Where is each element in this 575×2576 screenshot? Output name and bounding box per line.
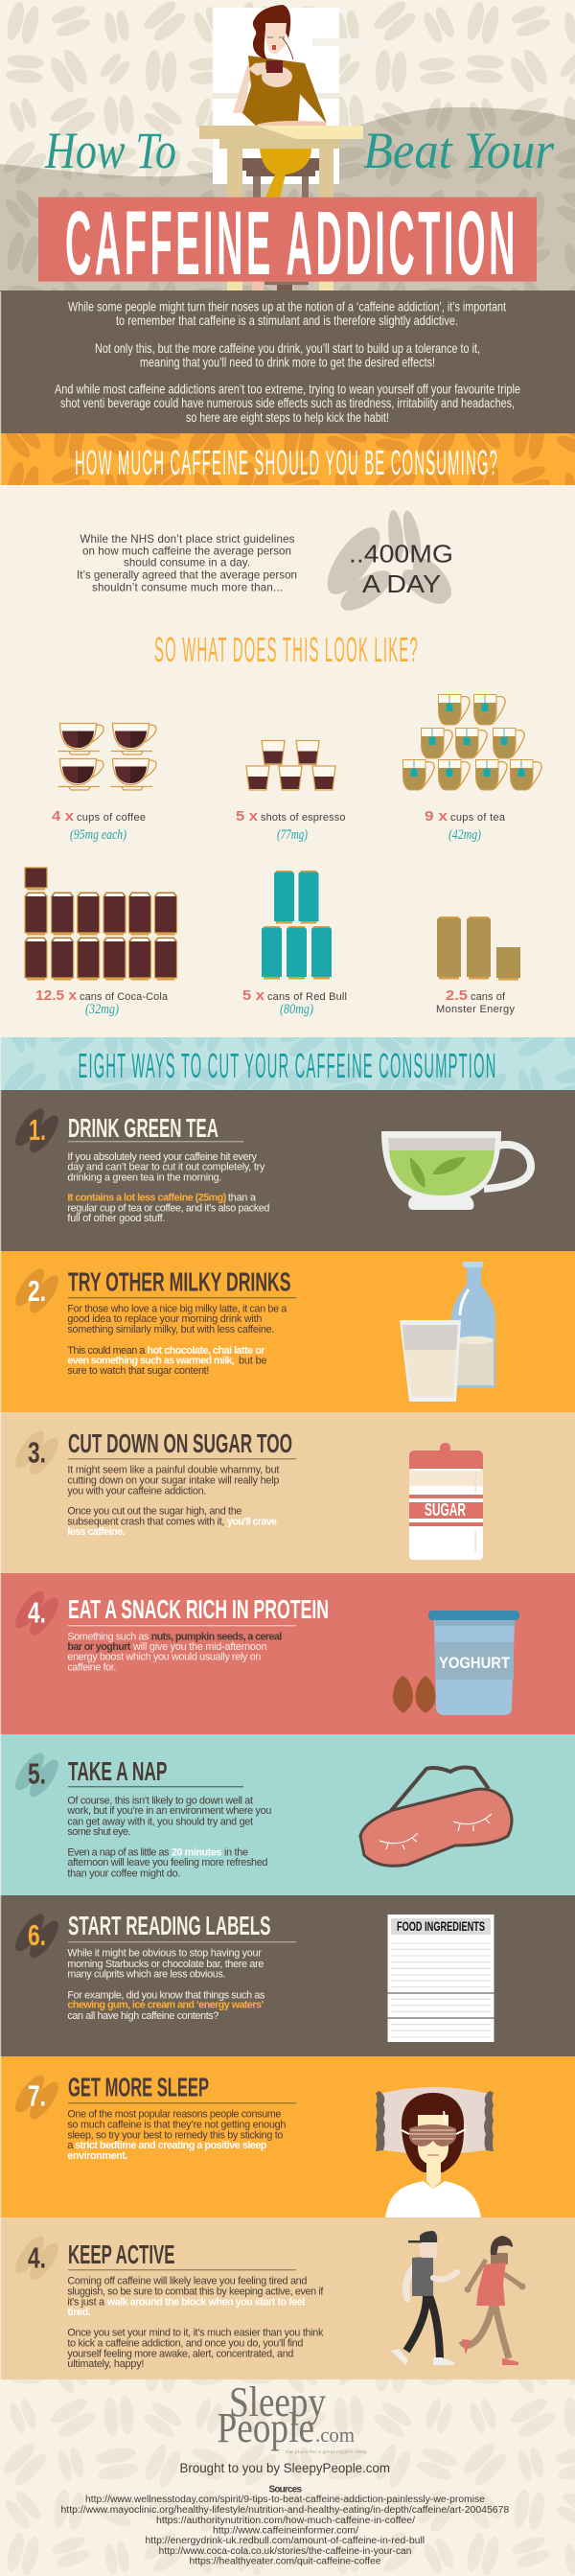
body text: Even a nap of as little as [67, 1847, 170, 1859]
number 4: 4. [28, 2241, 46, 2275]
body text: drinking a green tea in the morning. [67, 1172, 221, 1183]
heading: TRY OTHER MILKY DRINKS [68, 1267, 291, 1296]
body text: environment. [67, 2150, 127, 2162]
body text: This could mean a [67, 1345, 145, 1357]
body text: will give you the mid-afternoon [132, 1641, 266, 1653]
label: cups of coffee [52, 808, 146, 843]
number 1 [11, 1104, 63, 1157]
number 7: 7. [28, 2079, 46, 2113]
body text: yourself feeling more awake, alert, concentrated, and [67, 2348, 293, 2359]
panel: recommended amount [0, 485, 575, 1037]
number 5 [11, 1749, 63, 1801]
panel: step 1 drink green tea [0, 1090, 575, 1251]
body text: strict bedtime and creating a positive sleep [75, 2140, 267, 2151]
sources: https://healthyeater.com/quit-caffeine-coffee [190, 2556, 381, 2567]
label: cups of coffee: cups of coffee [77, 812, 146, 824]
body text: full of other good stuff. [67, 1213, 165, 1224]
label: cans of red bull: cans of Red Bull [267, 991, 347, 1003]
label: cans of coca-cola: 12.5 x [35, 987, 78, 1004]
label: cans of monster energy: cans of [471, 991, 506, 1003]
icon: red bull cans [262, 870, 332, 980]
body text: 20 minutes [172, 1847, 221, 1859]
body text [67, 2109, 286, 2162]
sources: http://www.coca-cola.co.uk/stories/the-caffeine-in-your-can [159, 2546, 411, 2557]
body text [66, 1796, 271, 1879]
body text: Once you cut out the sugar high, and the [67, 1505, 242, 1517]
body text: than a [228, 1193, 256, 1204]
number 7 [11, 2071, 63, 2123]
body text: nuts, pumpkin seeds, a cereal [151, 1632, 282, 1643]
body text: than your coffee might do. [67, 1868, 180, 1879]
panel: introduction: to remember that caffeine is a stimulant and is therefore slightly addictive. [116, 313, 458, 328]
callout: 400mg a day [349, 540, 453, 598]
panel: step 3 cut down on sugar too [0, 1412, 575, 1573]
text: NHS guidelines: shouldn’t consume much more than... [92, 581, 283, 593]
heading: EAT A SNACK RICH IN PROTEIN [68, 1594, 329, 1624]
icon: milk bottle and glass [400, 1262, 495, 1402]
label: cups of tea: (42mg) [448, 827, 481, 843]
body text: afternoon will leave you feeling more refreshed [67, 1857, 267, 1868]
label: cans of monster energy: 2.5 [446, 987, 468, 1004]
callout: 400mg a day: ..400MG [349, 540, 453, 569]
sources: http://www.mayoclinic.org/healthy-lifestyle/nutrition-and-healthy-eating/in-depth/caffeine/art-20045678 [61, 2505, 510, 2516]
body text: It might seem like a painful double whammy, but [67, 1465, 279, 1476]
panel: step 5 take a nap [0, 1734, 575, 1895]
body text: you with your caffeine addiction. [67, 1485, 206, 1497]
icon: sugar jar [409, 1443, 483, 1560]
callout: 400mg a day: A DAY [362, 569, 441, 598]
body text: tired. [67, 2307, 91, 2318]
panel: step 7 get more sleep [0, 2056, 575, 2217]
heading: How To: How To [44, 122, 176, 179]
icon: four cups of coffee [58, 723, 156, 790]
body text [67, 1151, 269, 1224]
label: shots of espresso: shots of espresso [261, 812, 345, 824]
icon: woman walking [462, 2236, 525, 2365]
label: cans of coca-cola [35, 987, 169, 1017]
footer with bean pattern [0, 2379, 575, 2576]
heading: GET MORE SLEEP [68, 2073, 209, 2102]
table legs below banner [227, 282, 334, 290]
heading: Beat Your: Beat Your [363, 122, 555, 179]
credit line: Brought to you by SleepyPeople.com [180, 2460, 390, 2475]
body text: chewing gum, ice cream and ‘energy waters’ [67, 2000, 264, 2011]
body text: subsequent crash that comes with it, [67, 1517, 224, 1528]
icon: yoghurt pot and almonds [393, 1611, 519, 1715]
icon: coca-cola cans [25, 868, 176, 980]
number 2 [11, 1265, 63, 1317]
number 5: 5. [28, 1757, 46, 1791]
body text: sluggish, so be sure to combat this by keeping active, even if [67, 2286, 324, 2297]
body text: If you absolutely need your caffeine hit every [67, 1151, 257, 1163]
label: shots of espresso: 5 x [236, 808, 259, 824]
number 6 [11, 1910, 63, 1962]
icon: sleep mask [360, 1768, 512, 1866]
label: cups of tea: 9 x [425, 808, 448, 824]
sources [61, 2485, 510, 2567]
body text: regular cup of tea or coffee, and it’s also packed [67, 1202, 269, 1214]
logo: Sleepy People: .com [315, 2423, 355, 2447]
logo: Sleepy People: People [217, 2404, 314, 2451]
illustration: woman drinking coffee at a table [199, 5, 368, 290]
body text [67, 1465, 279, 1538]
number 6: 6. [28, 1918, 46, 1952]
body text: can get away with it, you should try and get [67, 1816, 253, 1827]
body text: even something such as warmed milk, [67, 1355, 235, 1366]
body text: For those who love a nice big milky latte, it can be a [67, 1303, 287, 1314]
logo: Sleepy People: Sleepy [229, 2379, 326, 2425]
heading: DRINK GREEN TEA [68, 1113, 218, 1143]
panel: step 4 eat a snack rich in protein [0, 1573, 575, 1734]
text: NHS guidelines [77, 533, 297, 593]
body text: bar or yoghurt [67, 1641, 131, 1653]
body text: walk around the block when you start to feel [106, 2296, 305, 2308]
label: cans of red bull: (80mg) [280, 1002, 313, 1017]
panel: introduction: meaning that you’ll need to drink more to get the desired effects! [140, 355, 435, 370]
icon: yoghurt pot and almonds: YOGHURT [439, 1654, 511, 1672]
label: cans of monster energy [436, 987, 516, 1015]
body text: One of the most popular reasons people consume [67, 2109, 281, 2121]
body text [67, 1303, 287, 1377]
body text [67, 1632, 282, 1674]
body text: many culprits which are less obvious. [67, 1968, 225, 1980]
label: cups of tea [425, 808, 506, 843]
body text: you’ll crave [227, 1517, 277, 1528]
body text: something similarly milky, but with less caffeine. [67, 1324, 274, 1335]
icon: food ingredients label: FOOD INGREDIENTS [397, 1918, 485, 1934]
body text: day and can’t bear to cut it out completely, try [67, 1162, 265, 1173]
body text: Coming off caffeine will likely leave you feeling tired and [67, 2276, 307, 2287]
body text: sure to watch that sugar content! [67, 1365, 209, 1377]
body text: While it might be obvious to stop having your [67, 1948, 262, 1960]
body text [67, 1948, 265, 2022]
section band: eight ways [0, 1037, 575, 1090]
number 3 [11, 1427, 63, 1479]
panel: step 6 start reading labels [0, 1895, 575, 2056]
number 4 [11, 1587, 63, 1639]
icon: sugar jar: SUGAR [425, 1500, 466, 1520]
icon: large coffee beans [318, 509, 458, 617]
body text: Once you set your mind to it, it’s much easier than you think [67, 2328, 324, 2339]
label: cups of coffee: 4 x [52, 808, 75, 824]
label: shots of espresso: (77mg) [277, 827, 308, 843]
number 3: 3. [28, 1436, 46, 1470]
body text: to kick a caffeine addiction, and once you do, you’ll find [67, 2337, 303, 2349]
text: NHS guidelines: While the NHS don’t place strict guidelines [80, 533, 295, 545]
icon: monster energy cans [437, 917, 520, 980]
number 1: 1. [29, 1113, 46, 1147]
body text: energy boost which you would usually rely on [67, 1652, 261, 1663]
panel: step 2 try other milky drinks [0, 1251, 575, 1412]
body text: morning Starbucks or chocolate bar, there are [67, 1959, 264, 1970]
body text: good idea to replace your morning drink with [67, 1313, 262, 1325]
body text: it’s just a [67, 2296, 104, 2308]
heading: CUT DOWN ON SUGAR TOO [68, 1428, 292, 1458]
sources: https://authoritynutrition.com/how-much-caffeine-in-coffee/ [156, 2516, 415, 2526]
body text: Something such as [67, 1632, 150, 1643]
header background with coffee bean pattern [0, 0, 575, 291]
body text: ultimately, happy! [67, 2358, 144, 2370]
number 2: 2. [28, 1274, 46, 1308]
section band: how much caffeine [0, 433, 575, 485]
body text: but be [239, 1355, 266, 1366]
number 4 [11, 2232, 63, 2285]
heading: START READING LABELS [68, 1911, 270, 1940]
body text [67, 2276, 324, 2370]
body text: sleep, so try your best to remedy this by sticking to [67, 2129, 283, 2141]
label: cups of coffee: (95mg each) [70, 827, 126, 843]
icon: food ingredients label [387, 1915, 494, 2042]
panel: introduction [0, 290, 575, 433]
body text: It contains a lot less caffeine (25mg) [67, 1193, 227, 1204]
label: cups of tea: cups of tea [450, 812, 506, 824]
body text: Of course, this isn’t likely to go down well at [67, 1796, 253, 1807]
label: cans of coca-cola: (32mg) [85, 1002, 119, 1017]
body text: cutting down on your sugar intake will really help [67, 1474, 279, 1486]
body text: hot chocolate, chai latte or [148, 1345, 265, 1357]
label: cans of coca-cola: cans of Coca-Cola [80, 991, 169, 1003]
body text: so much caffeine is that they’re not getting enough [67, 2119, 286, 2130]
icon: man walking [391, 2231, 457, 2365]
icon: five espresso shots [246, 740, 335, 790]
heading: KEEP ACTIVE [68, 2239, 174, 2269]
sources: Sources [268, 2485, 302, 2495]
body text: less caffeine. [67, 1526, 125, 1538]
logo: Sleepy People: the place for a great night's sleep [286, 2448, 367, 2455]
sources: http://www.caffeineinformer.com/ [213, 2525, 358, 2537]
text: NHS guidelines: should consume in a day. [124, 557, 250, 569]
label: cans of red bull: 5 x [242, 987, 265, 1004]
body text: For example, did you know that things such as [67, 1989, 265, 2001]
text: NHS guidelines: on how much caffeine the average person [82, 545, 291, 557]
text: NHS guidelines: It’s generally agreed that the average person [77, 569, 297, 582]
label: cans of monster energy: Monster Energy [436, 1004, 516, 1015]
body text: a [67, 2140, 73, 2151]
body text: some shut eye. [67, 1826, 130, 1838]
sources: http://www.wellnesstoday.com/spirit/9-tips-to-beat-caffeine-addiction-painlessly-we-promise [85, 2495, 485, 2505]
body text: caffeine for. [67, 1662, 116, 1674]
sources: http://energydrink-uk.redbull.com/amount-of-caffeine-in-red-bull [146, 2536, 425, 2546]
icon: nine cups of tea [402, 694, 541, 790]
icon: green tea cup [381, 1131, 531, 1210]
heading: TAKE A NAP [68, 1756, 167, 1786]
number 4: 4. [28, 1596, 46, 1630]
label: shots of espresso [236, 808, 345, 843]
label: cans of red bull [242, 987, 347, 1017]
logo: Sleepy People [217, 2379, 367, 2455]
icon: sleeping woman on pillow [376, 2087, 494, 2217]
body text: in the [224, 1847, 248, 1859]
body text: can all have high caffeine contents? [67, 2010, 218, 2022]
body text: work, but if you’re in an environment where you [66, 1805, 271, 1817]
panel: introduction: so here are eight steps to help kick the habit! [186, 409, 389, 425]
panel: step 8 keep active [0, 2217, 575, 2379]
